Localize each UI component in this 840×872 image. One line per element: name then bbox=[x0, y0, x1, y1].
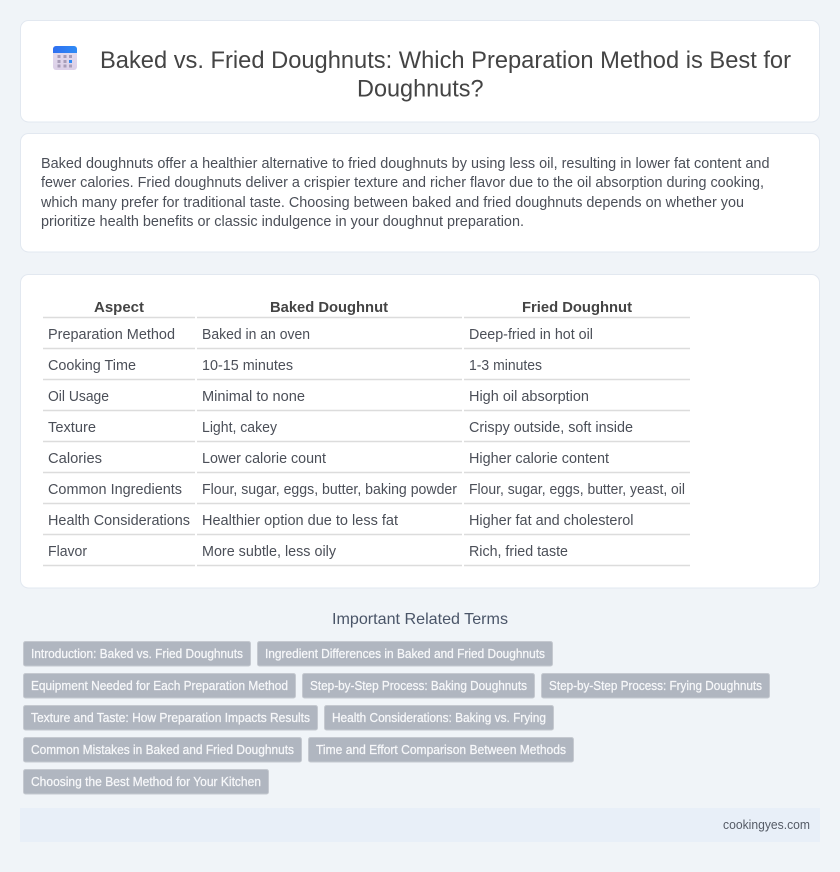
tag bbox=[24, 738, 302, 762]
tag: Step-by-Step Process: Baking Doughnuts bbox=[310, 679, 527, 693]
heading: related terms: Important Related Terms bbox=[332, 611, 508, 628]
footer bbox=[20, 808, 820, 842]
tag: Equipment Needed for Each Preparation Method bbox=[31, 679, 288, 693]
row: flavor: Flavor bbox=[48, 544, 87, 560]
row: oil usage: High oil absorption bbox=[469, 389, 589, 405]
text block: summary bbox=[40, 156, 770, 230]
row: common ingredients: Flour, sugar, eggs, butter, baking powder bbox=[202, 482, 457, 498]
tag bbox=[24, 642, 250, 666]
tag: Ingredient Differences in Baked and Fried Doughnuts bbox=[265, 647, 545, 661]
row: calories: Lower calorie count bbox=[202, 451, 326, 467]
table header: Aspect bbox=[94, 299, 144, 316]
text block: summary: Baked doughnuts offer a healthier alternative to fried doughnuts by using less oil, resulting in lower fat content and bbox=[41, 156, 770, 172]
table header bbox=[94, 299, 632, 316]
row: oil usage: Oil Usage bbox=[48, 389, 109, 405]
tag bbox=[324, 706, 554, 730]
title: Doughnuts? bbox=[357, 76, 484, 102]
row: preparation method bbox=[48, 327, 593, 343]
text block: summary: prioritize health benefits or classic indulgence in your doughnut preparation. bbox=[41, 214, 524, 230]
title: Baked vs. Fried Doughnuts: Which Preparation Method is Best for bbox=[100, 47, 791, 74]
row: texture: Crispy outside, soft inside bbox=[469, 420, 633, 436]
tag bbox=[24, 770, 268, 794]
row: calories bbox=[48, 451, 609, 467]
row: preparation method: Deep-fried in hot oil bbox=[469, 327, 593, 343]
row: health considerations: Healthier option due to less fat bbox=[202, 513, 398, 529]
row: common ingredients: Common Ingredients bbox=[48, 482, 182, 498]
row: cooking time bbox=[48, 358, 542, 374]
row: oil usage bbox=[48, 389, 589, 405]
tag: Texture and Taste: How Preparation Impacts Results bbox=[31, 711, 310, 725]
tag bbox=[24, 706, 318, 730]
row: flavor bbox=[48, 544, 568, 560]
row: cooking time: 10-15 minutes bbox=[202, 358, 293, 374]
row: preparation method: Preparation Method bbox=[48, 327, 175, 343]
row: health considerations: Health Considerations bbox=[48, 513, 190, 529]
row: cooking time: Cooking Time bbox=[48, 358, 136, 374]
row: texture: Light, cakey bbox=[202, 420, 278, 436]
footer: cookingyes.com bbox=[723, 818, 810, 832]
tag: Introduction: Baked vs. Fried Doughnuts bbox=[31, 647, 243, 661]
row: health considerations bbox=[48, 513, 634, 529]
title bbox=[100, 47, 791, 102]
tag: Health Considerations: Baking vs. Frying bbox=[332, 711, 546, 725]
row: flavor: More subtle, less oily bbox=[202, 544, 337, 560]
row: calories: Higher calorie content bbox=[469, 451, 609, 467]
tag: Time and Effort Comparison Between Methods bbox=[316, 743, 566, 757]
row: texture: Texture bbox=[48, 420, 96, 436]
related terms tags bbox=[24, 642, 770, 794]
tag bbox=[308, 738, 574, 762]
row: cooking time: 1-3 minutes bbox=[469, 358, 542, 374]
row: preparation method: Baked in an oven bbox=[202, 327, 310, 343]
tag bbox=[24, 674, 296, 698]
tag bbox=[302, 674, 534, 698]
tag bbox=[542, 674, 770, 698]
row: health considerations: Higher fat and cholesterol bbox=[469, 513, 634, 529]
tag bbox=[258, 642, 552, 666]
tag: Step-by-Step Process: Frying Doughnuts bbox=[549, 679, 762, 693]
row: oil usage: Minimal to none bbox=[202, 389, 305, 405]
tag: Common Mistakes in Baked and Fried Doughnuts bbox=[31, 743, 294, 757]
row: common ingredients bbox=[48, 482, 685, 498]
text block: summary: which many prefer for traditional taste. Choosing between baked and fried doughnuts depends on whether you bbox=[40, 195, 744, 211]
row: common ingredients: Flour, sugar, eggs, butter, yeast, oil bbox=[469, 482, 685, 498]
icon: calendar bbox=[53, 46, 77, 70]
row: calories: Calories bbox=[48, 451, 102, 467]
table header: Baked Doughnut bbox=[270, 299, 388, 316]
panel: comparison table bbox=[20, 274, 820, 588]
panel: summary paragraph bbox=[20, 134, 820, 252]
row: texture bbox=[48, 420, 633, 436]
tag: Choosing the Best Method for Your Kitchen bbox=[31, 775, 261, 789]
table header: Fried Doughnut bbox=[522, 299, 632, 316]
row: flavor: Rich, fried taste bbox=[469, 544, 568, 560]
text block: summary: fewer calories. Fried doughnuts deliver a crispier texture and richer flavor due to the oil absorption during cooking, bbox=[41, 175, 764, 191]
panel: title header bbox=[20, 20, 820, 122]
